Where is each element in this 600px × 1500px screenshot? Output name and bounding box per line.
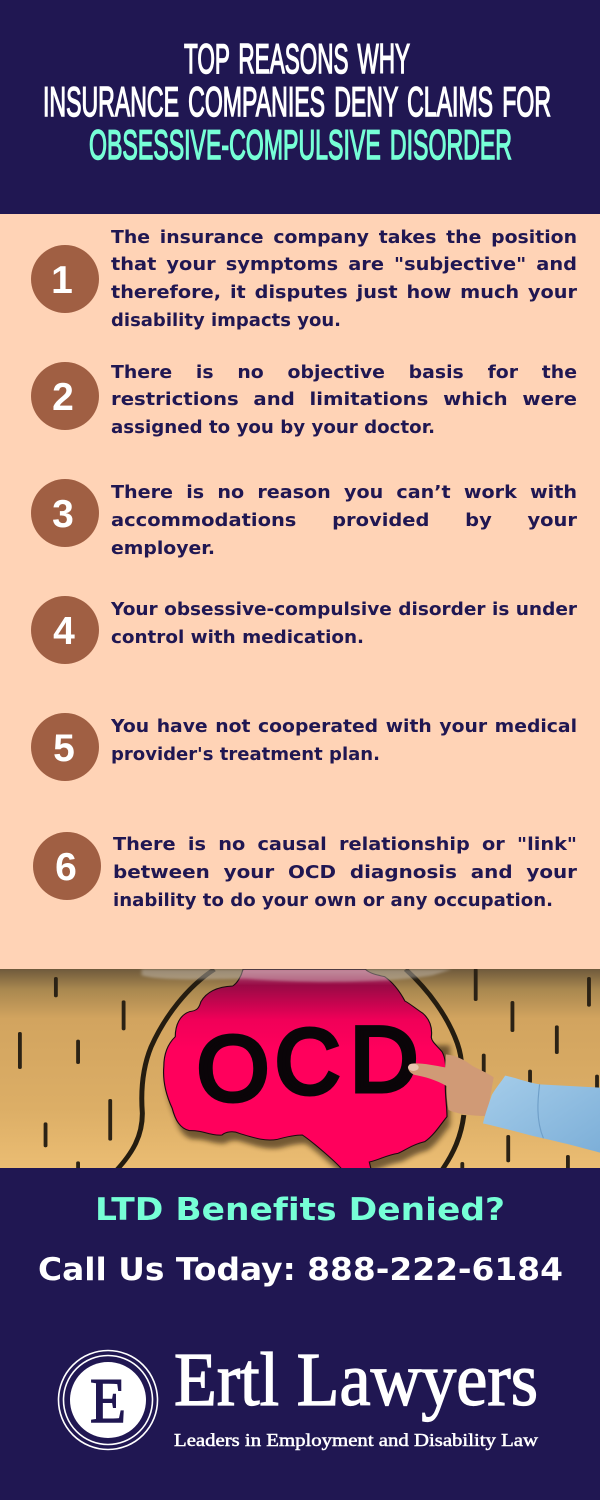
reason 6 text: There is no causal relationship or "link" <box>113 835 577 855</box>
thumb nail <box>408 1064 419 1071</box>
reason 5 <box>31 713 577 781</box>
reason 5 text: You have not cooperated with your medical <box>110 717 577 737</box>
reason 3 text: accommodations provided by your <box>111 511 577 531</box>
reason 3 text: There is no reason you can’t work with <box>111 483 577 503</box>
firm name: Ertl Lawyers <box>174 1338 538 1422</box>
reason 3 text <box>111 483 577 559</box>
reason 2 text: assigned to you by your doctor. <box>111 418 435 438</box>
badge 4 <box>31 596 99 664</box>
reason 6 text: inability to do your own or any occupation. <box>113 891 553 911</box>
logo <box>58 1338 538 1450</box>
reason 1 text: disability impacts you. <box>111 311 341 331</box>
reason 1 <box>31 228 577 331</box>
footer panel <box>0 1168 600 1500</box>
logo emblem <box>58 1350 158 1450</box>
brain shadow <box>167 1045 450 1179</box>
OCD lettering: C <box>275 1011 340 1113</box>
reason 4 text <box>110 600 577 648</box>
badge 2: 2 <box>52 376 74 419</box>
reason 3 <box>31 479 577 559</box>
reason 1 text: that your symptoms are "subjective" and <box>111 255 577 275</box>
top haze <box>142 969 452 982</box>
badge 5 <box>31 713 99 781</box>
reason 6 text <box>113 835 577 911</box>
pink brain <box>164 969 447 1170</box>
badge 5: 5 <box>53 727 75 770</box>
badge 4: 4 <box>53 610 75 653</box>
reason 2 <box>31 362 577 438</box>
logo emblem: E <box>90 1365 126 1436</box>
badge 6 <box>33 832 101 900</box>
reason 2 text <box>111 363 577 438</box>
sleeve cuff fold <box>538 1084 543 1138</box>
reason 6 <box>33 832 577 911</box>
header panel <box>0 0 600 214</box>
call to action heading: LTD Benefits Denied? <box>95 1192 505 1228</box>
hand <box>408 1054 494 1116</box>
reason 3 text: employer. <box>111 539 215 559</box>
reason 4 text: control with medication. <box>111 628 364 648</box>
wall dashes <box>20 970 597 1170</box>
reason 2 text: There is no objective basis for the <box>111 363 577 383</box>
badge 2 <box>31 362 99 430</box>
reason 1 text: The insurance company takes the position <box>111 228 577 248</box>
OCD lettering: O <box>197 1018 269 1120</box>
badge 3: 3 <box>52 493 74 536</box>
phone number: Call Us Today: 888-222-6184 <box>38 1252 563 1288</box>
reason 2 text: restrictions and limitations which were <box>111 390 577 410</box>
reason 4 text: Your obsessive-compulsive disorder is under <box>110 600 577 620</box>
title line 1: TOP REASONS WHY <box>184 35 410 82</box>
photo: OCD brain held by hand <box>0 969 600 1179</box>
tagline: Leaders in Employment and Disability Law <box>174 1430 538 1450</box>
reason 1 text <box>111 228 577 331</box>
badge 3 <box>31 479 99 547</box>
reason 5 text: provider's treatment plan. <box>111 745 380 765</box>
reason 5 text <box>110 717 577 765</box>
shirt sleeve <box>483 1076 600 1153</box>
OCD lettering <box>198 1025 416 1104</box>
reason 1 text: therefore, it disputes just how much your <box>111 283 577 303</box>
OCD lettering: D <box>350 1009 418 1111</box>
head outline <box>117 969 464 1170</box>
peach content background <box>0 214 600 969</box>
badge 6: 6 <box>55 846 77 889</box>
reason 6 text: between your OCD diagnosis and your <box>113 863 577 883</box>
badge 1: 1 <box>51 259 73 302</box>
reason 4 <box>31 596 577 664</box>
badge 1 <box>31 245 99 313</box>
